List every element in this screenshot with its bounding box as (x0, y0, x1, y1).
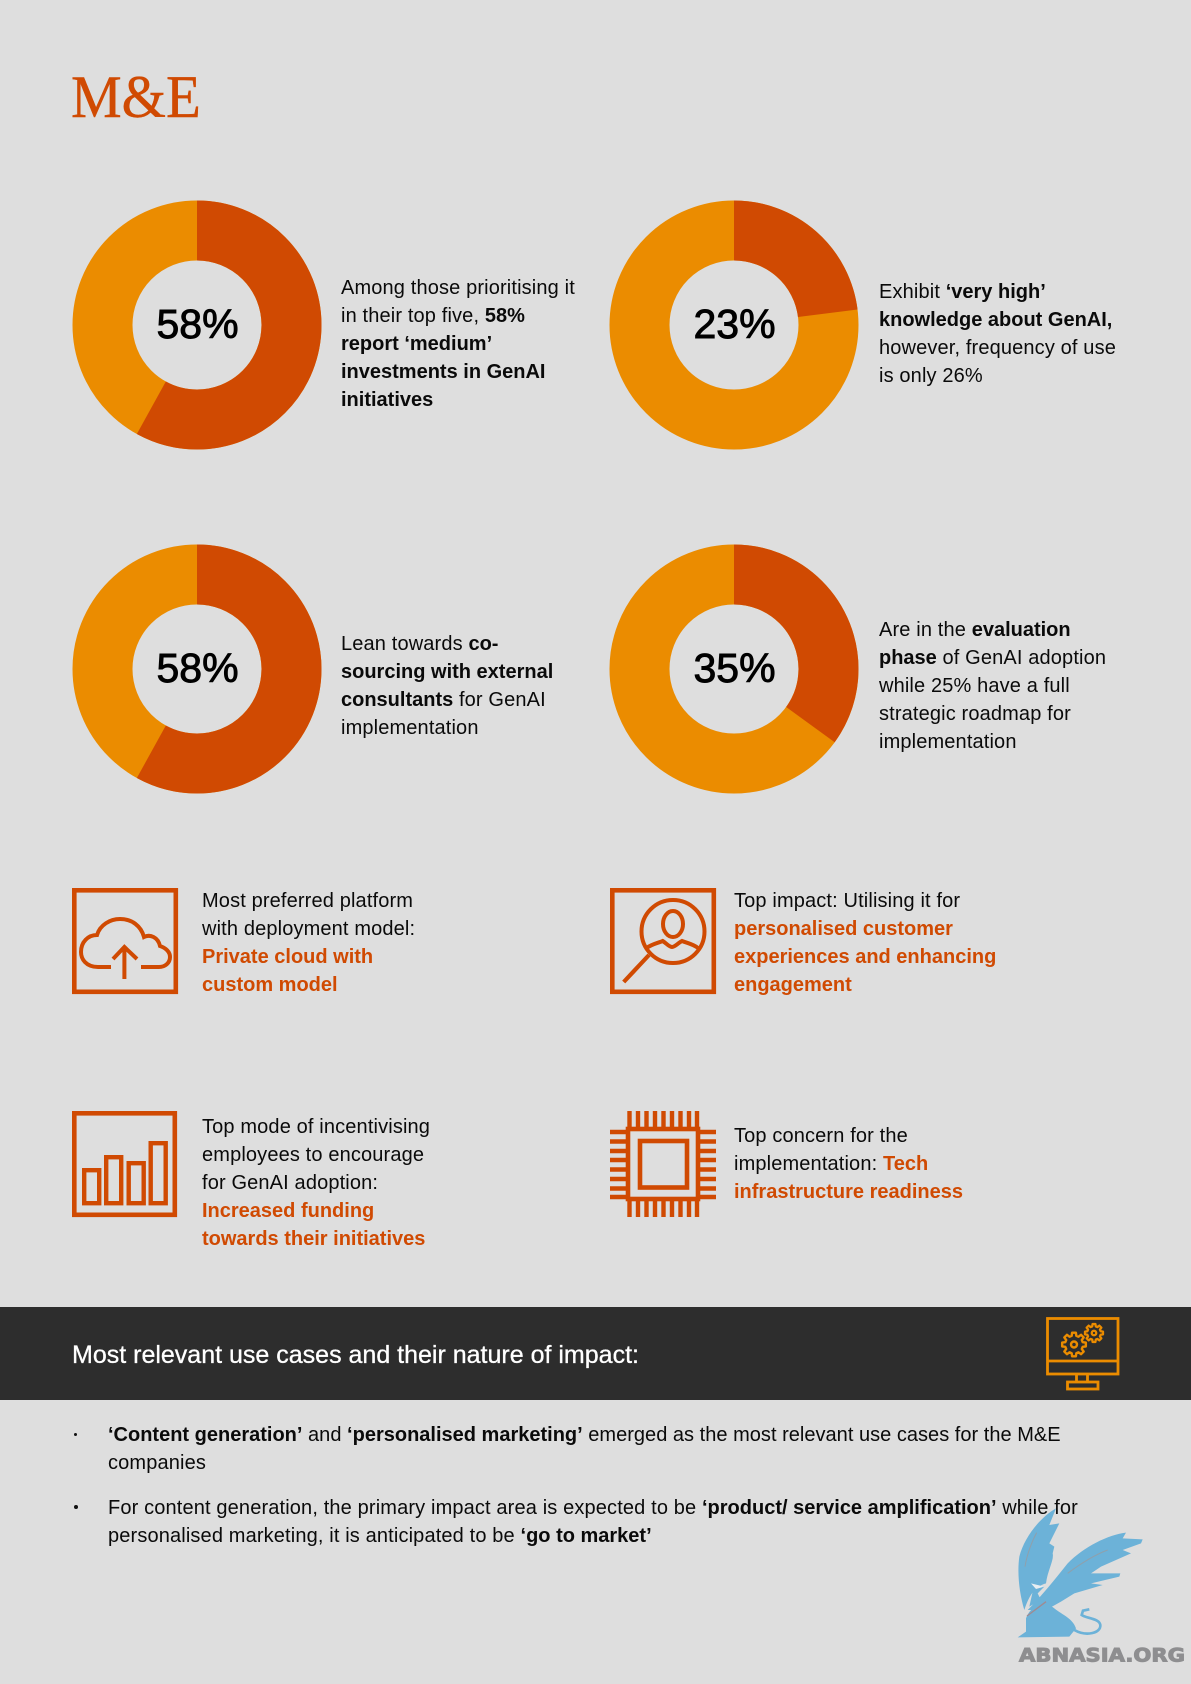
text: top impact (734, 890, 996, 996)
text: platform: Private cloud with (202, 946, 373, 968)
bullet text 2: personalised marketing, it is anticipated to be ‘go to market’ (108, 1525, 652, 1547)
bullet text 1: companies (108, 1452, 206, 1474)
text: co-sourcing: sourcing with external (341, 661, 553, 683)
text: platform: Most preferred platform (202, 890, 413, 912)
text: investments: in their top five, 58% (341, 305, 525, 327)
donut chart: 58% medium investments (72, 200, 322, 450)
text: knowledge: is only 26% (879, 365, 983, 387)
text: evaluation phase: while 25% have a full (879, 675, 1070, 697)
text: incentives (202, 1116, 430, 1250)
text: investments: initiatives (341, 389, 433, 411)
banner: use cases (0, 1307, 1191, 1400)
text: investments: investments in GenAI (341, 361, 546, 383)
text: incentives: Top mode of incentivising (202, 1116, 430, 1138)
text: incentives: employees to encourage (202, 1144, 424, 1166)
text: evaluation phase: implementation (879, 731, 1017, 753)
watermark text: ABNASIA.ORG (1019, 1645, 1185, 1667)
donut chart: 35% evaluation phase: 35% (693, 645, 776, 691)
bullet text 1 (108, 1424, 1061, 1474)
text: investments (341, 277, 575, 411)
text: co-sourcing (341, 633, 553, 739)
title: M&E (71, 64, 201, 131)
donut chart: 58% co-sourcing (72, 544, 322, 794)
text: incentives: for GenAI adoption: (202, 1172, 378, 1194)
bullet dot 2 (74, 1505, 78, 1509)
bullet dot 1 (74, 1433, 77, 1436)
text: incentives: Increased funding (202, 1200, 374, 1222)
donut chart: 58% medium investments: 58% (156, 301, 239, 347)
text: top concern: implementation: Tech (734, 1153, 928, 1175)
text: knowledge: knowledge about GenAI, (879, 309, 1112, 331)
bullet text 2: For content generation, the primary impact area is expected to be ‘product/ service amplification’ while for (108, 1497, 1078, 1519)
text: platform: with deployment model: (202, 918, 415, 940)
text: platform: custom model (202, 974, 338, 996)
text: knowledge: Exhibit ‘very high’ (879, 281, 1046, 303)
text: evaluation phase (879, 619, 1106, 753)
text: investments: report ‘medium’ (341, 333, 492, 355)
text: evaluation phase: Are in the evaluation (879, 619, 1071, 641)
text: top concern: infrastructure readiness (734, 1181, 963, 1203)
donut chart: 35% evaluation phase (610, 544, 858, 794)
text: top impact: experiences and enhancing (734, 946, 996, 968)
text: incentives: towards their initiatives (202, 1228, 425, 1250)
text: co-sourcing: consultants for GenAI (341, 689, 546, 711)
text: top impact: Top impact: Utilising it for (734, 890, 960, 912)
text: knowledge: however, frequency of use (879, 337, 1116, 359)
donut chart: 58% co-sourcing: 58% (156, 645, 239, 691)
banner heading: Most relevant use cases and their nature of impact: (72, 1341, 639, 1369)
donut chart: 23% very high knowledge: 23% (693, 301, 776, 347)
watermark: griffin logo (1018, 1508, 1185, 1667)
text: knowledge (879, 281, 1116, 387)
text: co-sourcing: implementation (341, 717, 479, 739)
text: top impact: engagement (734, 974, 852, 996)
donut chart: 23% very high knowledge (610, 200, 858, 450)
text: platform (202, 890, 415, 996)
text: top concern: Top concern for the (734, 1125, 908, 1147)
text: co-sourcing: Lean towards co- (341, 633, 498, 655)
text: top impact: personalised customer (734, 918, 953, 940)
text: top concern (734, 1125, 963, 1203)
bullet text 2 (108, 1497, 1078, 1547)
text: investments: Among those prioritising it (341, 277, 575, 299)
text: evaluation phase: phase of GenAI adoption (879, 647, 1106, 669)
bullet text 1: ‘Content generation’ and ‘personalised marketing’ emerged as the most relevant use cases for the M&E (108, 1424, 1061, 1446)
text: evaluation phase: strategic roadmap for (879, 703, 1071, 725)
